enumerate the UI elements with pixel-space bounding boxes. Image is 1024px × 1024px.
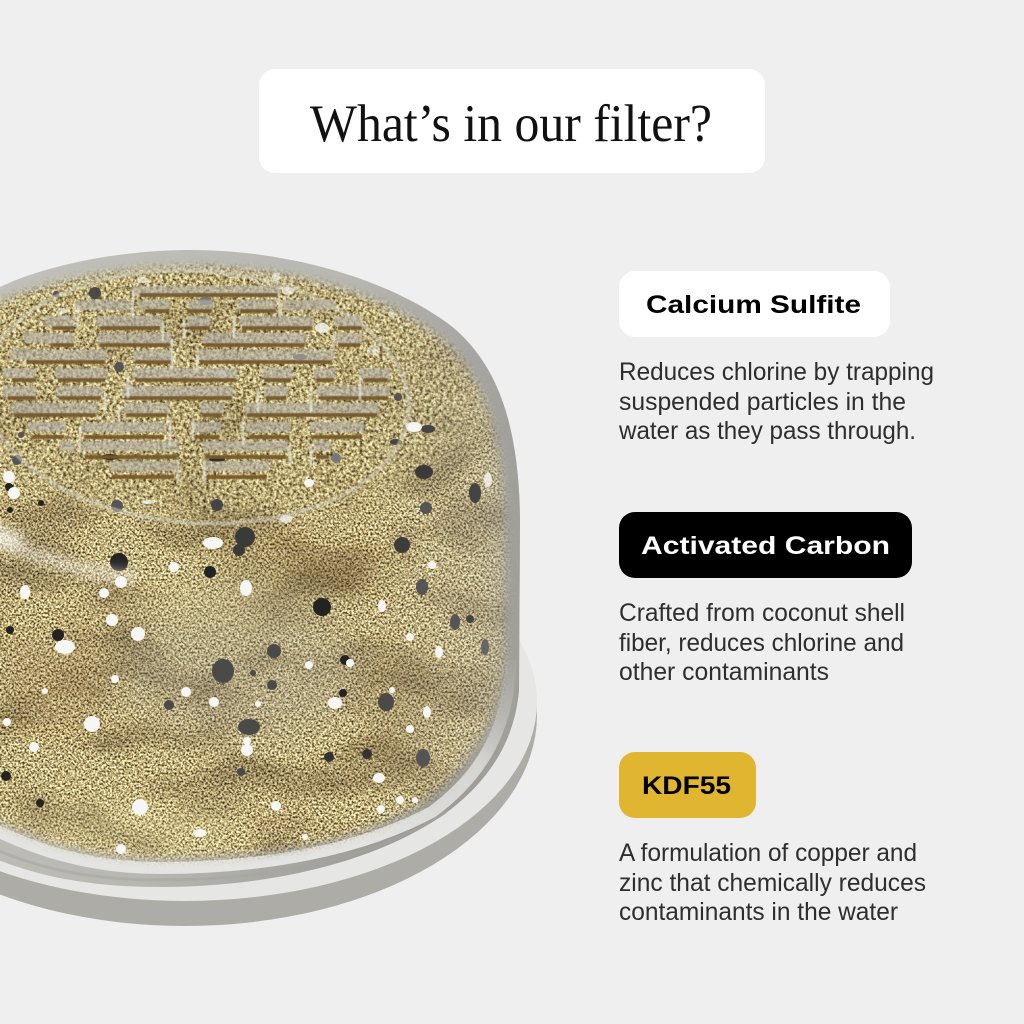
description: Activated Carbon: Crafted from coconut shell bbox=[619, 599, 905, 627]
gold channels bbox=[8, 295, 388, 477]
glass dome bbox=[0, 250, 520, 887]
description: KDF55: contaminants in the water bbox=[619, 898, 898, 926]
right side glass shading bbox=[0, 250, 520, 887]
coarse top media bbox=[0, 261, 488, 538]
label pill: Activated Carbon bbox=[619, 512, 912, 578]
white speckles bbox=[3, 273, 492, 854]
glass lip bbox=[0, 660, 511, 880]
granular filter media bbox=[0, 255, 525, 870]
filter cartridge illustration bbox=[0, 250, 537, 926]
speckles bbox=[1, 273, 492, 854]
ingredient: Calcium Sulfite bbox=[618, 271, 934, 445]
description: Calcium Sulfite bbox=[618, 358, 934, 445]
label pill: KDF55 bbox=[619, 752, 756, 818]
description: Activated Carbon bbox=[619, 599, 905, 686]
label pill: KDF55: KDF55 bbox=[642, 772, 731, 800]
brown media shading bbox=[0, 548, 435, 850]
dark speckles bbox=[1, 287, 489, 807]
label pill: Calcium Sulfite bbox=[619, 271, 890, 337]
base ring bbox=[0, 503, 537, 926]
description: Calcium Sulfite: Reduces chlorine by trapping bbox=[619, 358, 934, 386]
description: Calcium Sulfite: suspended particles in the bbox=[619, 388, 906, 416]
disc outline bbox=[0, 257, 417, 537]
description: KDF55: zinc that chemically reduces bbox=[619, 869, 926, 897]
label pill: Calcium Sulfite: Calcium Sulfite bbox=[646, 291, 861, 319]
infographic canvas bbox=[0, 69, 932, 926]
description: Activated Carbon: other contaminants bbox=[619, 658, 829, 686]
description: Activated Carbon: fiber, reduces chlorine and bbox=[619, 629, 904, 657]
ingredient: KDF55 bbox=[619, 752, 926, 926]
title: What’s in our filter? bbox=[310, 95, 712, 153]
ingredient: Activated Carbon bbox=[619, 512, 912, 686]
description: KDF55 bbox=[619, 839, 926, 926]
glass highlights bbox=[0, 530, 135, 577]
title panel bbox=[259, 69, 765, 173]
glass bars bbox=[3, 291, 390, 466]
description: Calcium Sulfite: water as they pass through. bbox=[618, 417, 916, 445]
label pill: Activated Carbon: Activated Carbon bbox=[641, 532, 890, 560]
bright vertical ribs bbox=[78, 291, 360, 482]
description: KDF55: A formulation of copper and bbox=[619, 839, 917, 867]
maze lattice disc bbox=[0, 257, 417, 537]
